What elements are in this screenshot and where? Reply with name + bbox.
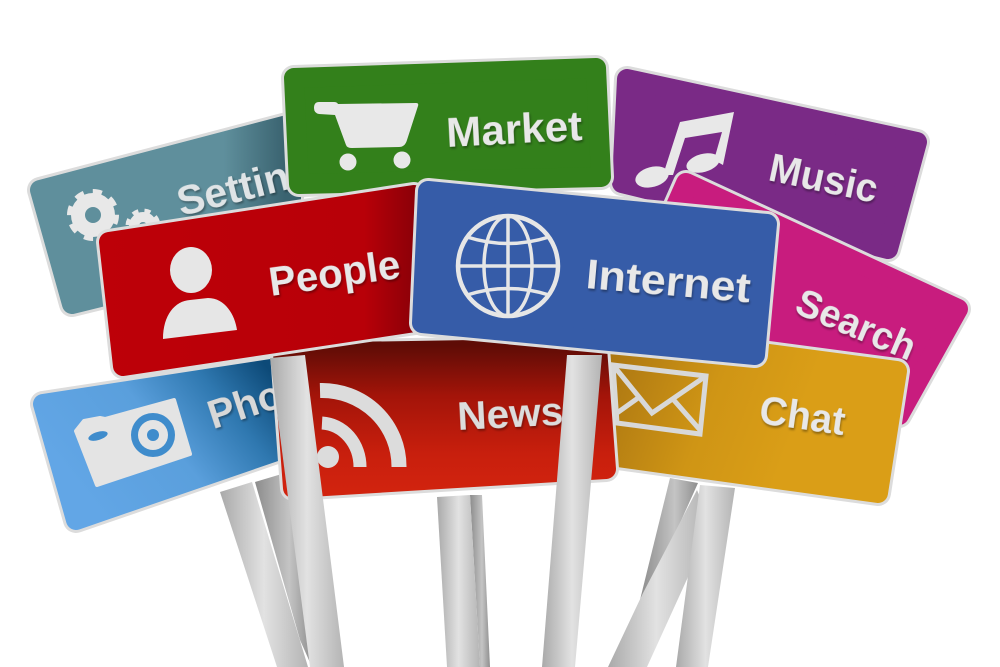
icon: shopping cart bbox=[314, 102, 418, 170]
icon: globe bbox=[458, 216, 558, 316]
icon: envelope bbox=[613, 365, 706, 434]
icon: person bbox=[163, 247, 237, 339]
panel: photo bbox=[43, 361, 324, 520]
label: news: News bbox=[456, 390, 564, 439]
back posts bbox=[220, 470, 735, 667]
panel: internet bbox=[422, 191, 767, 355]
label: music: Music bbox=[765, 146, 882, 212]
icon: music notes bbox=[633, 112, 734, 191]
front posts bbox=[270, 355, 602, 667]
label: photo: Photo bbox=[202, 361, 324, 438]
panel: search bbox=[637, 183, 958, 415]
panel: market bbox=[294, 68, 601, 184]
panel: settings bbox=[40, 124, 340, 304]
panel: chat bbox=[603, 332, 897, 493]
panel: news bbox=[283, 348, 606, 488]
label: internet: Internet bbox=[584, 250, 753, 311]
icon: rss feed bbox=[317, 390, 399, 468]
label: chat: Chat bbox=[757, 388, 848, 444]
icon: gear bbox=[70, 192, 158, 241]
panel: music bbox=[622, 79, 917, 249]
label: settings: Settings bbox=[172, 141, 340, 225]
icon: camera bbox=[76, 400, 190, 485]
label: people: People bbox=[266, 241, 403, 305]
label: search: Search bbox=[789, 281, 922, 370]
label: market: Market bbox=[445, 102, 583, 156]
panel: people bbox=[109, 195, 415, 366]
